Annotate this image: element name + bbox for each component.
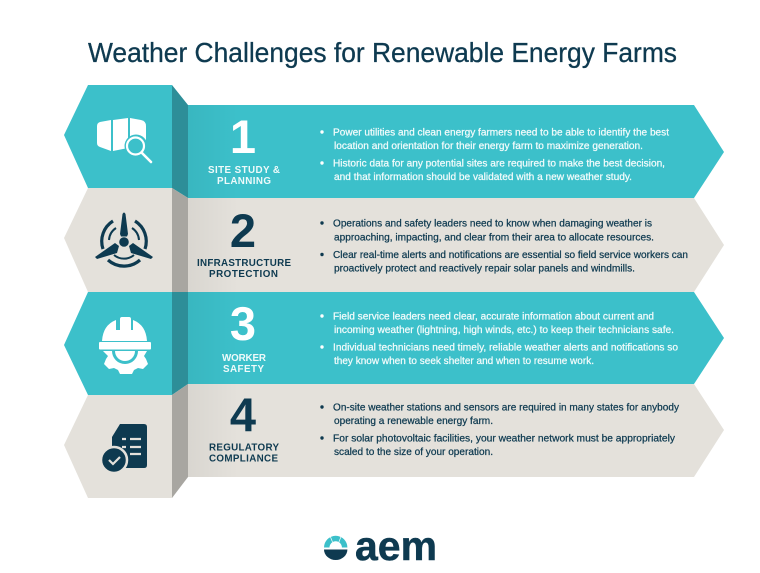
bullets 2: approaching, impacting, and clear from their area to allocate resources. bbox=[334, 232, 654, 244]
bullets 2: proactively protect and reactively repair solar panels and windmills. bbox=[334, 264, 635, 274]
label 1 bbox=[208, 165, 280, 187]
label 3: SAFETY bbox=[223, 364, 264, 375]
panel: worker safety bbox=[64, 292, 724, 395]
number 3: 3 bbox=[230, 297, 256, 350]
bullets 1: location and orientation for their energy farm to maximize generation. bbox=[334, 141, 643, 152]
label 2: PROTECTION bbox=[209, 269, 278, 280]
label 4 bbox=[209, 442, 279, 464]
panel: infrastructure protection bbox=[64, 188, 724, 292]
left hexagon 4 bbox=[64, 395, 172, 498]
bullets 4 bbox=[320, 402, 680, 458]
bullets 1: Historic data for any potential sites are required to make the best decision, bbox=[333, 158, 665, 170]
arrow body 2 bbox=[188, 198, 724, 292]
left hexagon 2 bbox=[64, 188, 172, 292]
fold 2 bbox=[172, 188, 188, 292]
icon: map with magnifier bbox=[97, 118, 151, 162]
number 2: 2 bbox=[230, 204, 256, 257]
bullets 3: Field service leaders need clear, accurate information about current and bbox=[333, 312, 654, 322]
label 1: SITE STUDY & bbox=[208, 165, 280, 176]
icon: wind turbine bbox=[95, 212, 153, 266]
bullets 3: Individual technicians need timely, reliable weather alerts and notifications so bbox=[333, 342, 678, 354]
label 1: PLANNING bbox=[217, 176, 271, 187]
logo: aem: aem bbox=[355, 523, 437, 569]
bullets 4: operating a renewable energy farm. bbox=[334, 416, 493, 427]
number 1: 1 bbox=[230, 110, 256, 163]
bullets 4: scaled to the size of your operation. bbox=[334, 447, 493, 458]
bullets 1: and that information should be validated with a new weather study. bbox=[334, 172, 632, 183]
arrow body 3 bbox=[188, 292, 724, 384]
number 4: 4 bbox=[230, 388, 256, 441]
bullets 3: they know when to seek shelter and when to resume work. bbox=[334, 356, 594, 367]
title: Weather Challenges for Renewable Energy Farms bbox=[88, 37, 677, 68]
left hexagon 3 bbox=[64, 292, 172, 395]
label 2: INFRASTRUCTURE bbox=[197, 258, 291, 269]
arrow body 4 bbox=[188, 384, 724, 477]
label 4: REGULATORY bbox=[209, 442, 279, 454]
label 3: WORKER bbox=[222, 353, 266, 364]
bullets 1 bbox=[320, 128, 669, 183]
panel: regulatory compliance bbox=[64, 384, 724, 498]
label 2 bbox=[197, 258, 291, 280]
bullets 2: Clear real-time alerts and notifications are essential so field service workers can bbox=[333, 250, 688, 261]
left hexagon 1 bbox=[64, 85, 172, 188]
bullets 3: incoming weather (lightning, high winds, etc.) to keep their technicians safe. bbox=[334, 325, 674, 336]
panel: site study and planning bbox=[64, 85, 724, 198]
fold 3 bbox=[172, 292, 188, 395]
bullets 2: Operations and safety leaders need to know when damaging weather is bbox=[333, 218, 652, 230]
label 3 bbox=[222, 353, 266, 375]
bullets 3 bbox=[320, 312, 678, 367]
icon: hard hat with gear bbox=[99, 317, 151, 374]
fold 1 bbox=[172, 85, 188, 198]
fold 4 bbox=[172, 384, 188, 498]
bullets 4: For solar photovoltaic facilities, your weather network must be appropriately bbox=[333, 434, 676, 444]
arrow body 1 bbox=[188, 105, 724, 198]
bullets 2 bbox=[320, 218, 688, 274]
bullets 4: On-site weather stations and sensors are required in many states for anybody bbox=[333, 402, 680, 414]
label 4: COMPLIANCE bbox=[209, 454, 278, 464]
bullets 1: Power utilities and clean energy farmers need to be able to identify the best bbox=[333, 128, 669, 138]
icon: document with check bbox=[101, 424, 147, 473]
